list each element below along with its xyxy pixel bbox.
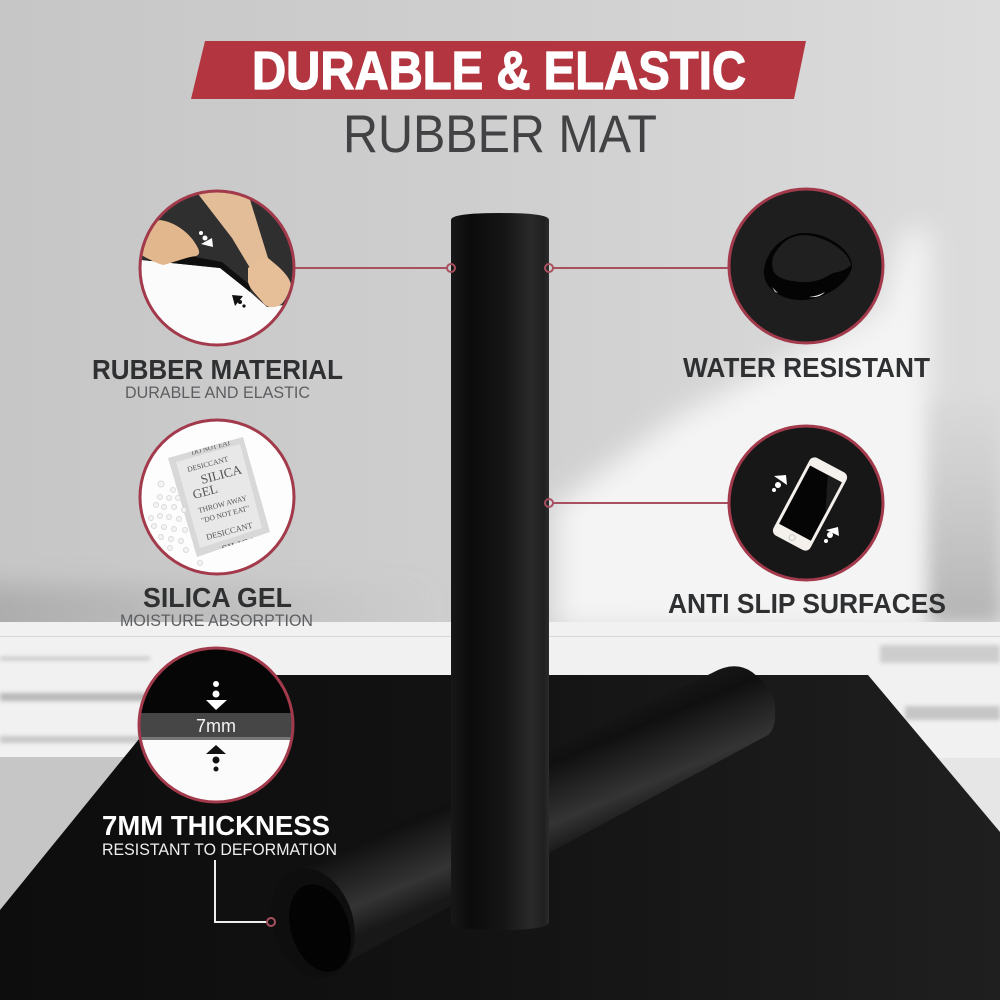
icon: silica gel packet: DESICCANT	[205, 520, 254, 542]
black rubber mat on the floor	[0, 675, 1000, 1000]
label: rubber material	[92, 354, 343, 402]
icon: silica gel packet: "DO NOT EAT"	[200, 503, 251, 525]
icon: silica gel packet: DO NOT EAT	[190, 438, 233, 457]
connector: water resistant	[545, 264, 729, 272]
silica beads	[148, 481, 202, 566]
roll end opening	[258, 857, 368, 989]
icon: silica gel packet: SILICA	[221, 535, 258, 556]
arrow down	[206, 681, 227, 710]
label: silica gel: SILICA GEL	[143, 582, 292, 613]
standing rolled mat	[451, 213, 549, 930]
icon: silica gel packet	[135, 415, 300, 580]
connector: anti slip	[545, 499, 729, 507]
label: silica gel: MOISTURE ABSORPTION	[120, 611, 313, 630]
arrow down	[199, 231, 213, 247]
arrow right	[824, 527, 839, 543]
icon: water droplet	[729, 189, 883, 343]
subtitle: RUBBER MAT	[343, 105, 657, 164]
label: anti slip surfaces: ANTI SLIP SURFACES	[668, 588, 946, 619]
label: rubber material: DURABLE AND ELASTIC	[125, 383, 310, 402]
icon: silica gel packet: THROW AWAY	[197, 493, 248, 515]
icon: silica gel packet: GEL	[191, 481, 219, 502]
7mm label: 7mm	[196, 716, 236, 736]
label: 7mm thickness: 7MM THICKNESS	[102, 810, 330, 841]
title banner: DURABLE & ELASTIC	[252, 41, 746, 101]
icon: 7mm thickness cross section	[135, 645, 300, 805]
arrow up	[232, 295, 246, 308]
connector: 7mm thickness	[215, 860, 275, 926]
arrow up	[206, 745, 226, 772]
phone	[771, 455, 849, 553]
icon: phone on anti slip surface	[729, 426, 883, 580]
label: water resistant: WATER RESISTANT	[683, 352, 930, 383]
connector: rubber material	[294, 264, 455, 272]
label: silica gel	[120, 582, 313, 630]
label: rubber material: RUBBER MATERIAL	[92, 354, 343, 385]
icon: silica gel packet: DESICCANT	[186, 454, 230, 474]
label: 7mm thickness	[102, 810, 337, 859]
label: 7mm thickness: RESISTANT TO DEFORMATION	[102, 840, 337, 859]
rolled mat lying on the floor	[258, 666, 775, 989]
icon: hands stretching rubber	[135, 185, 300, 350]
arrow left	[772, 475, 787, 492]
icon: silica gel packet: SILICA	[199, 461, 244, 487]
